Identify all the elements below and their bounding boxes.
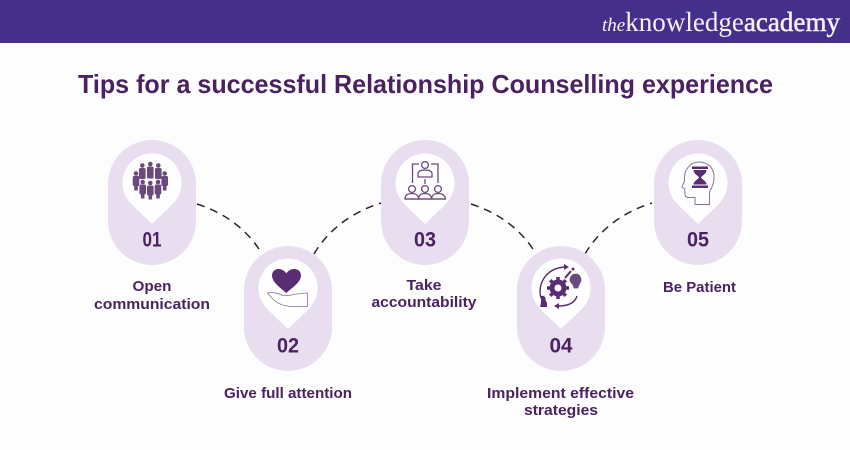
label: Implement effective strategies: strategies [524,402,598,419]
label: Open communication [94,278,210,313]
number 05: 05 [687,228,709,252]
icon: speaker and audience [405,162,446,199]
label: Implement effective strategies: Implement effective [487,385,634,402]
label: Take accountability [372,277,477,311]
label: Be Patient: Be Patient [663,279,736,296]
icon: heart in hand [268,269,308,306]
icon: gear, arrows, bulb and head [540,264,581,309]
label: Take accountability: accountability [372,294,477,311]
number 02: 02 [277,334,299,358]
label: Take accountability: Take [406,277,442,294]
label: Implement effective strategies [487,385,634,419]
number 01: 01 [142,228,162,252]
label: Open communication: Open [132,278,172,295]
label: Give full attention: Give full attention [224,385,352,402]
dashed connectors [197,203,652,254]
step 04 [517,246,605,371]
icon: head with hourglass [682,162,714,204]
step 02 [244,246,332,371]
step 03 [381,140,469,265]
number 04: 04 [550,334,573,358]
icon: group of people [133,162,168,200]
header banner [0,0,850,43]
number 03: 03 [414,228,436,252]
logo: theknowledgeacademy [602,7,841,37]
step 01 [108,140,196,265]
step 05 [654,140,742,265]
label: Open communication: communication [94,296,210,313]
title: Tips for a successful Relationship Counselling experience [78,69,773,99]
